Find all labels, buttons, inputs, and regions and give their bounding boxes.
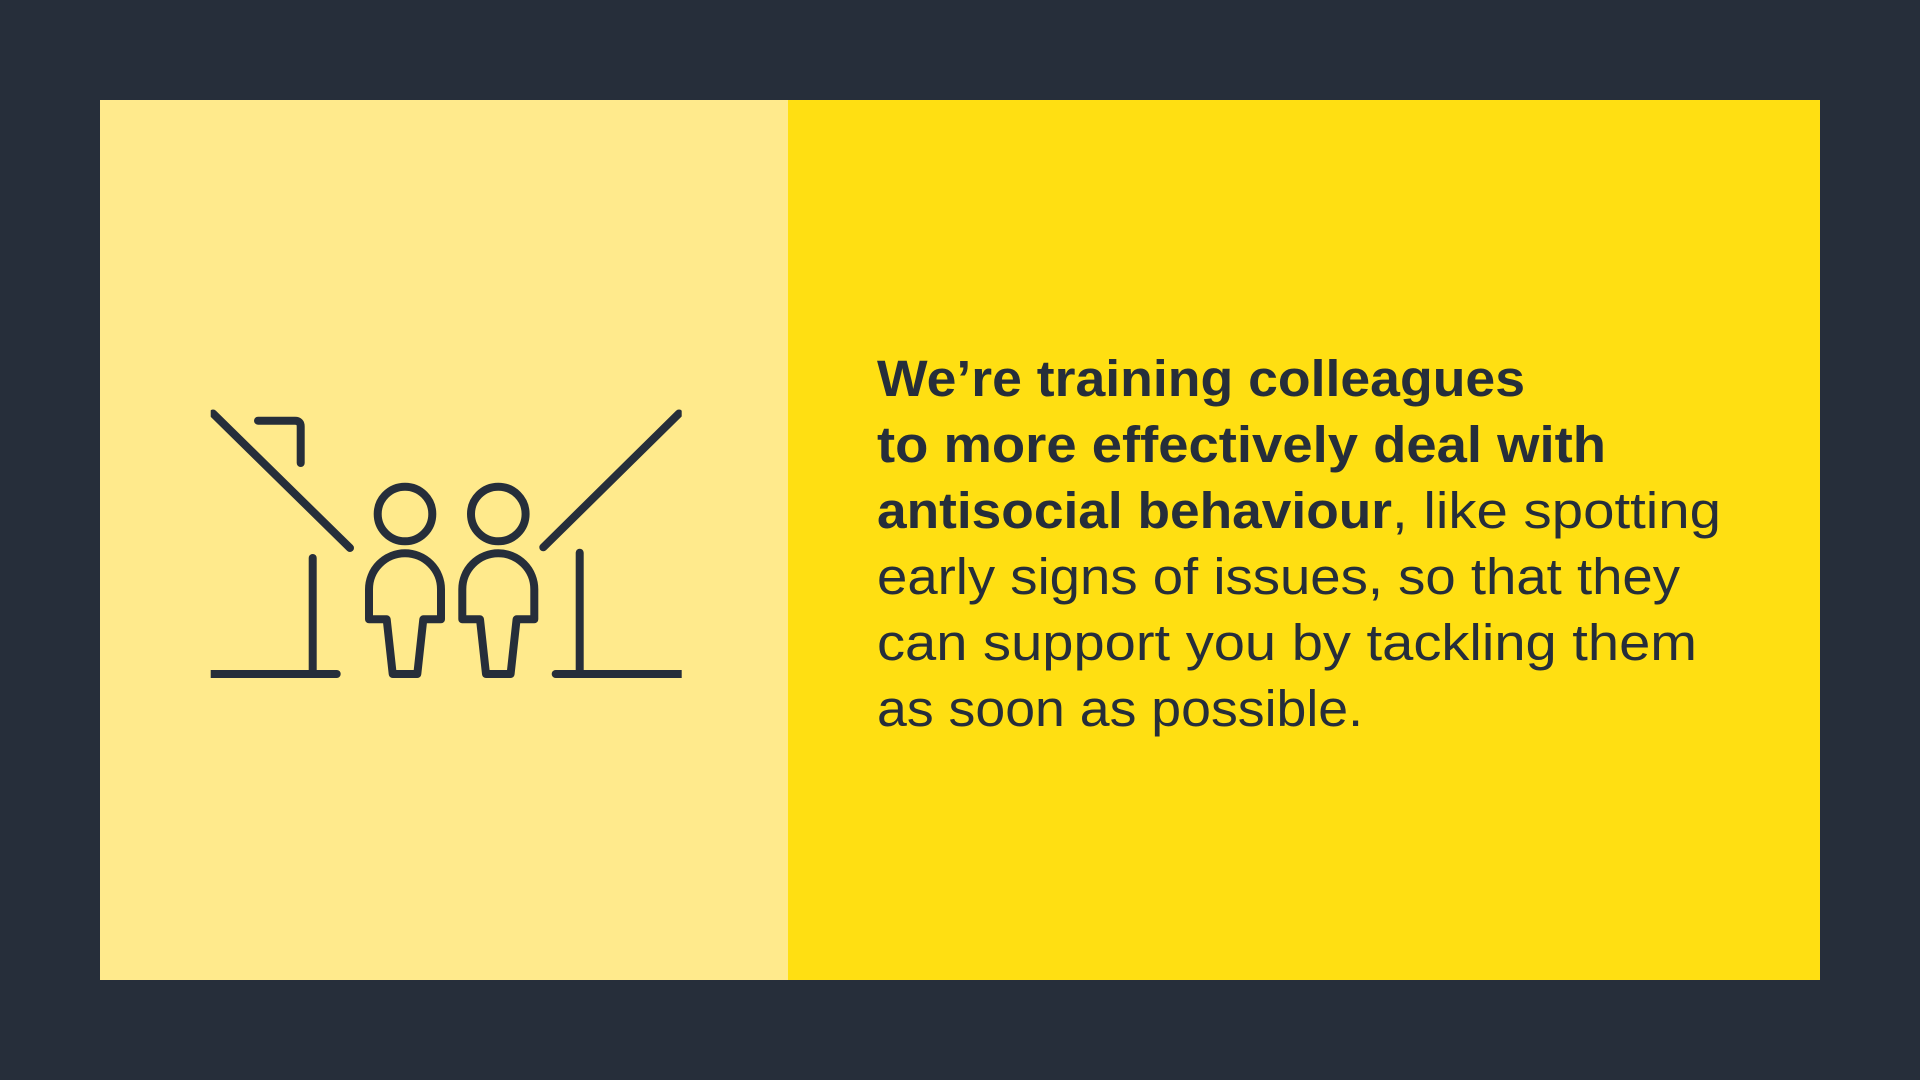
- right post: [576, 553, 584, 673]
- panel: text background: [788, 100, 1820, 980]
- text block: message: [877, 350, 1721, 737]
- line 6: as soon as possible.: [877, 680, 1363, 737]
- corner bracket: [258, 421, 301, 463]
- left diagonal barrier: [213, 414, 350, 548]
- line 3 regular: , like spotting: [1392, 482, 1721, 539]
- line 5: can support you by tackling them: [877, 614, 1697, 671]
- line 2: to more effectively deal with: [877, 416, 1606, 473]
- right base: [556, 670, 688, 678]
- line 1: We’re training colleagues: [877, 350, 1525, 407]
- person 2: [462, 487, 534, 674]
- left base: [205, 670, 337, 678]
- panel: icon background: [100, 100, 788, 980]
- left post: [309, 558, 317, 673]
- icon: two people between barriers: [205, 414, 688, 674]
- infographic slide: [100, 100, 1820, 980]
- line 4: early signs of issues, so that they: [877, 548, 1681, 605]
- line 3 bold: antisocial behaviour: [877, 482, 1392, 539]
- person 1: [369, 487, 441, 674]
- right diagonal barrier: [543, 414, 679, 547]
